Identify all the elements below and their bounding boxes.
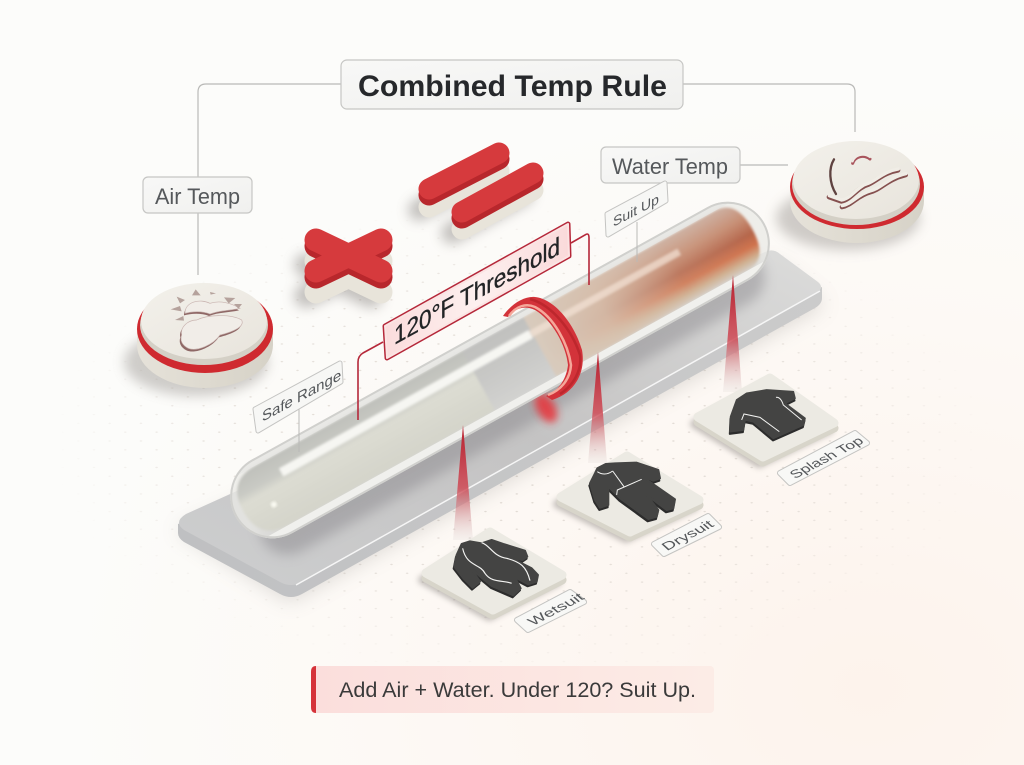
icon: water temperature button xyxy=(776,141,924,250)
icon: equals sign xyxy=(419,153,533,233)
connector: title to water button xyxy=(683,84,855,132)
neutral gray fill xyxy=(462,317,552,404)
card: drysuit xyxy=(557,456,719,554)
callout: safe range xyxy=(255,363,341,452)
threshold ring xyxy=(503,297,583,400)
safe range fill xyxy=(227,351,495,541)
beam: drysuit pointer xyxy=(588,352,607,463)
suit up warm fill xyxy=(563,206,762,346)
card: wetsuit xyxy=(422,532,588,630)
connector: title to air temp to air button xyxy=(198,84,341,275)
title: Combined Temp Rule xyxy=(358,70,667,103)
panel: metal base plate xyxy=(176,250,825,602)
label: wetsuit: Wetsuit xyxy=(525,591,588,628)
callout: suit up xyxy=(607,183,666,262)
callout: bottom rule banner: Add Air + Water. Under 120? Suit Up. xyxy=(339,678,696,702)
icon: splash top xyxy=(730,390,805,441)
label: air temp: Air Temp xyxy=(155,184,240,209)
chart: glass thermometer tube xyxy=(230,202,770,538)
title xyxy=(341,60,683,109)
beam: wetsuit pointer xyxy=(453,425,473,540)
connector: water temp label to water button xyxy=(740,164,788,166)
callout: safe range: Safe Range xyxy=(262,366,341,426)
icon: multiply sign xyxy=(306,240,381,296)
icon: sun and cloud emboss xyxy=(171,289,242,352)
icon: wetsuit xyxy=(454,540,538,597)
label: drysuit: Drysuit xyxy=(659,518,718,553)
callout: suit up: Suit Up xyxy=(613,192,659,231)
shadow under tube xyxy=(249,240,775,565)
callout: 120°F threshold: 120°F Threshold xyxy=(394,231,560,351)
icon: air temperature button xyxy=(124,283,273,396)
red glow on plate xyxy=(530,390,562,426)
card: splash top xyxy=(694,378,867,483)
callout: 120°F threshold xyxy=(358,224,589,420)
icon: water drop and waves emboss xyxy=(829,155,906,207)
callout: bottom rule banner xyxy=(311,666,714,713)
label: water temp: Water Temp xyxy=(612,154,728,179)
label: splash top: Splash Top xyxy=(787,435,867,481)
label: air temp xyxy=(143,177,252,213)
label: water temp xyxy=(601,147,740,183)
icon: drysuit xyxy=(589,463,675,521)
beam: splash top pointer xyxy=(723,275,742,392)
